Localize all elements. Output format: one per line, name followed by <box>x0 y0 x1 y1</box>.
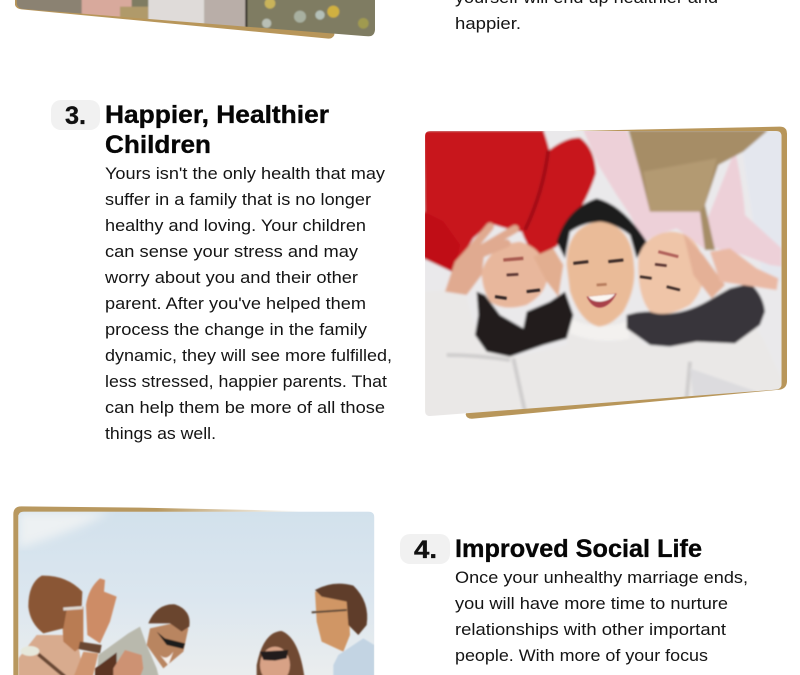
body text section 3: parent. After you've helped them <box>105 294 366 313</box>
body text section 3: less stressed, happier parents. That <box>105 372 387 391</box>
body text section 3: things as well. <box>105 424 216 443</box>
body text section 3 <box>104 164 392 443</box>
friends picture <box>17 510 377 675</box>
number badge 3: 3. <box>65 102 86 130</box>
photo: previous section, cropped at top <box>13 0 377 39</box>
man two <box>97 627 160 675</box>
heading: Happier, Healthier Children: Happier, Healthier <box>105 101 329 129</box>
body text section 3: process the change in the family <box>105 320 368 339</box>
panel: section 3 text <box>51 100 392 443</box>
number badge 4 <box>400 534 450 564</box>
gold frame <box>466 127 787 419</box>
heading: Improved Social Life: Improved Social Life <box>455 535 702 563</box>
body text section 3: suffer in a family that is no longer <box>105 190 371 209</box>
heading: Happier, Healthier Children: Children <box>105 131 211 159</box>
photo fragment <box>13 0 377 38</box>
body text section 4: relationships with other important <box>455 620 726 639</box>
body text section 4: people. With more of your focus <box>455 646 708 665</box>
body text section 3: Yours isn't the only health that may <box>105 164 386 183</box>
body text section 3: can help them be more of all those <box>105 398 385 417</box>
body text section 3: worry about you and their other <box>104 268 358 287</box>
body text section 3: healthy and loving. Your children <box>105 216 366 235</box>
family picture <box>423 128 783 418</box>
photo: mother and two children lying down <box>423 127 787 419</box>
panel: section 4 text <box>400 534 748 665</box>
body text section 4: Once your unhealthy marriage ends, <box>455 568 748 587</box>
body text section 3: dynamic, they will see more fulfilled, <box>105 346 392 365</box>
gold frame <box>13 506 300 675</box>
number badge 4: 4. <box>414 536 437 564</box>
text: end of section 2: happier. <box>455 14 521 33</box>
gold frame edge <box>15 0 334 39</box>
body text section 4 <box>455 568 748 665</box>
number badge 3 <box>51 100 100 130</box>
body text section 3: can sense your stress and may <box>105 242 359 261</box>
man three <box>315 592 350 652</box>
man one <box>18 635 83 675</box>
text: end of section 2 <box>455 0 718 33</box>
woman <box>257 631 305 675</box>
photo: friends laughing outdoors <box>13 506 377 675</box>
heading: Happier, Healthier Children <box>105 101 329 159</box>
body text section 4: you will have more time to nurture <box>455 594 728 613</box>
